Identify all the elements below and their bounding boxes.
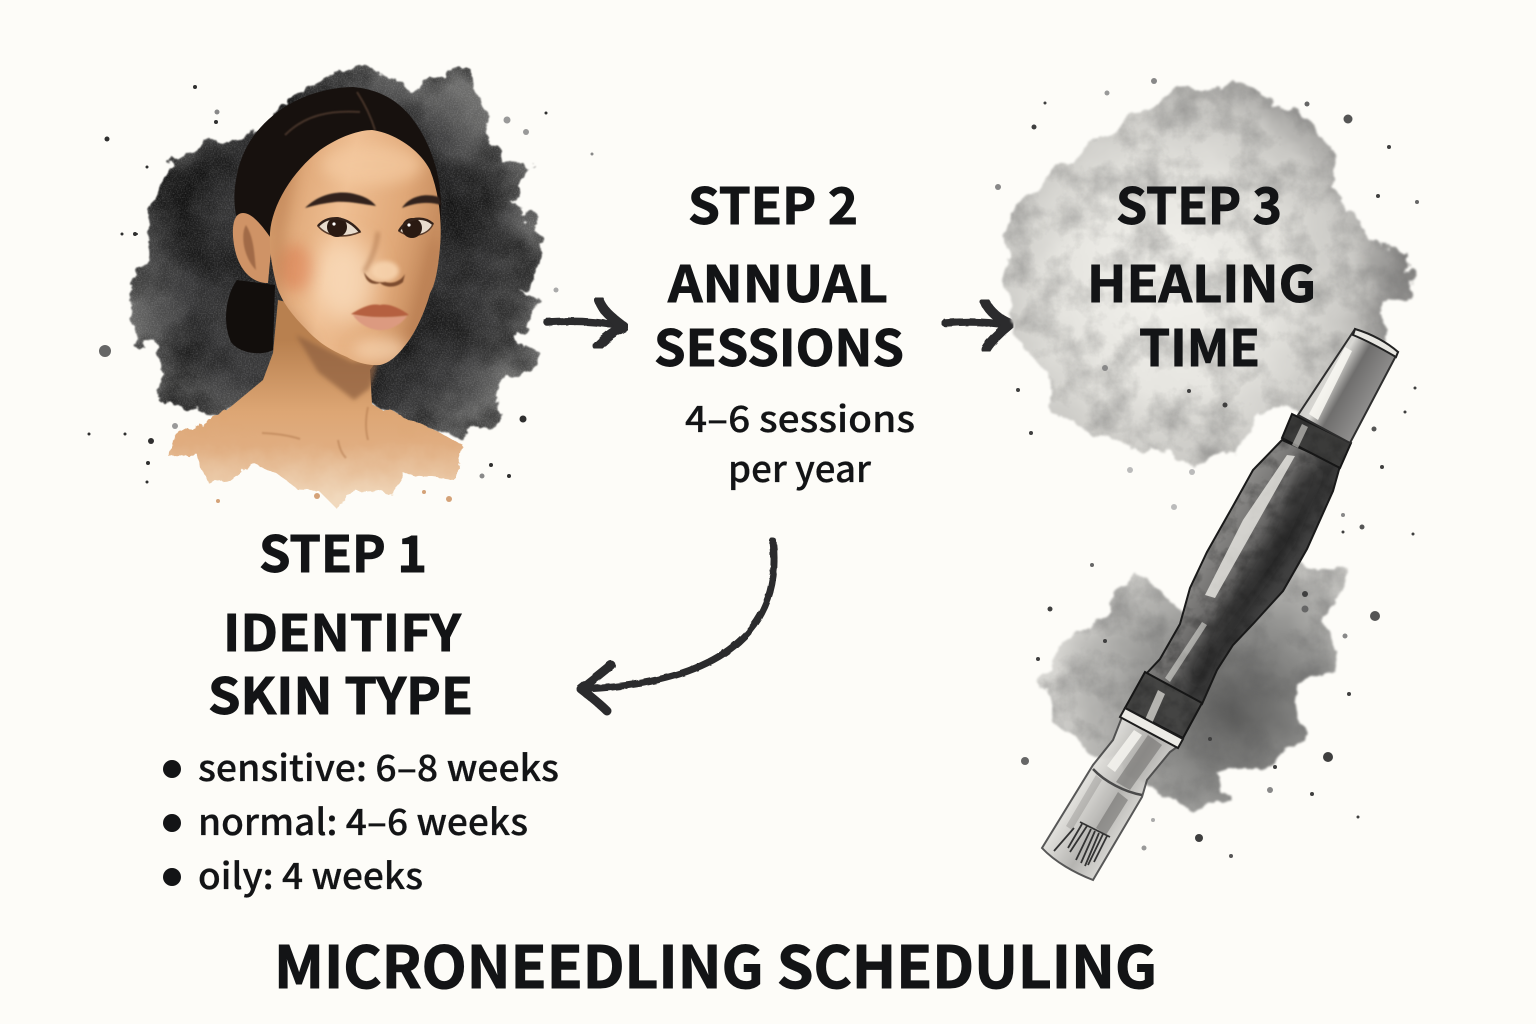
text: sessions per year: 4–6 sessions: [685, 391, 915, 443]
step 3 label: STEP 3: [1116, 167, 1282, 239]
bullet: oily: oily: 4 weeks: [198, 848, 423, 900]
step 2 label: STEP 2: [688, 167, 858, 239]
text: sessions per year: [685, 391, 915, 493]
cartridge streaks: [1066, 735, 1162, 835]
arrow: step 2 to step 3: [945, 302, 1010, 349]
heading: step 1: [208, 515, 473, 729]
step 2 title line 1: ANNUAL: [667, 245, 888, 317]
step 1 title line 1: IDENTIFY: [223, 594, 462, 666]
arrow: step 1 to step 2: [547, 300, 624, 346]
neck shadow: [296, 335, 378, 400]
right eye: [399, 218, 433, 238]
collar highlight: [1143, 690, 1165, 728]
bullet: sensitive: sensitive: 6–8 weeks: [198, 740, 559, 792]
upper collar: [1282, 414, 1351, 468]
upper collar highlight: [1292, 424, 1308, 448]
face: [270, 130, 445, 365]
tip ring: [1093, 769, 1142, 795]
skin tone splatter: [216, 490, 452, 503]
icon: microneedling pen: [1042, 329, 1398, 880]
body highlights: [1165, 455, 1295, 682]
text: sessions per year: per year: [728, 441, 871, 493]
step 1 label: STEP 1: [259, 515, 427, 587]
body dark side: [1185, 465, 1322, 690]
cap rim: [1353, 329, 1398, 357]
lips: [351, 304, 409, 330]
cartridge highlight: [1107, 730, 1142, 772]
step 2 title line 2: SESSIONS: [654, 309, 904, 381]
shoulder wash: [170, 410, 463, 505]
left eyebrow: [305, 193, 376, 208]
pen tip cartridge: [1042, 717, 1177, 880]
step 3 title line 2: TIME: [1139, 309, 1260, 381]
cap highlight: [1309, 347, 1352, 420]
ink splatter around pen and wash: [995, 78, 1419, 858]
step 3 title line 1: HEALING: [1087, 245, 1316, 317]
pen body: [1146, 440, 1340, 704]
face shading: [270, 145, 445, 363]
left eye: [318, 217, 360, 237]
hair highlights: [285, 92, 375, 135]
ink splatter around portrait: [88, 85, 594, 484]
clear top cap: [1298, 329, 1398, 443]
bullet: normal: normal: 4–6 weeks: [198, 794, 528, 846]
needle head: [1054, 822, 1110, 866]
heading: step 2: [654, 167, 904, 381]
ear: [233, 213, 272, 283]
hair bun: [226, 280, 275, 353]
panel: step 3 healing time wash: [1005, 80, 1407, 468]
arrow: step 2 back to step 1: [581, 541, 774, 711]
lower collar: [1125, 672, 1202, 738]
neck: [222, 300, 400, 440]
collarbone lines: [262, 407, 368, 458]
list: skin type intervals: [163, 740, 559, 900]
panel: step 1 portrait illustration: [88, 63, 594, 505]
nose: [364, 232, 405, 287]
ink wash behind portrait: [127, 63, 543, 440]
step 1 title line 2: SKIN TYPE: [208, 657, 473, 729]
title: MICRONEEDLING SCHEDULING: [274, 921, 1157, 1005]
silver ring: [1120, 708, 1183, 748]
ink wash behind microneedling pen: [1038, 560, 1345, 812]
hair: [234, 87, 441, 252]
right eyebrow: [402, 195, 441, 208]
